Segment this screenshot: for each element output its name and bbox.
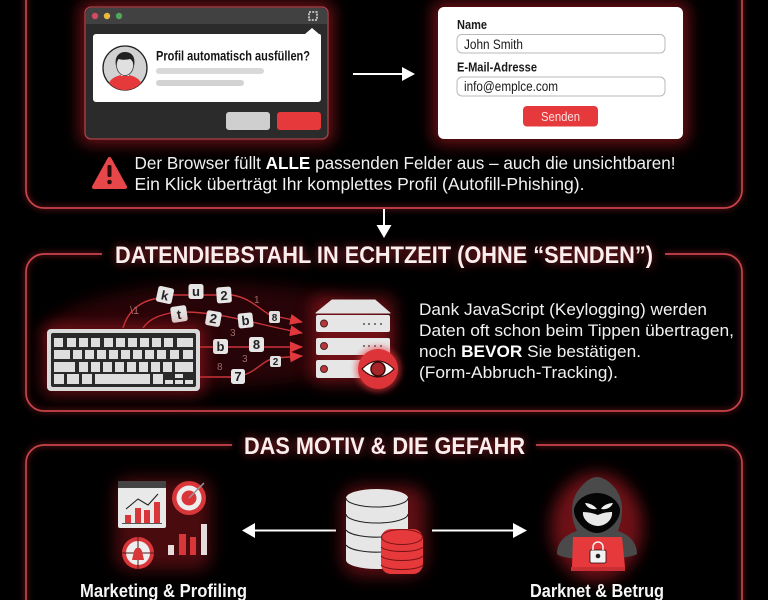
form: filled web form <box>433 2 688 144</box>
stray characters: 3 <box>242 354 248 365</box>
popup heading: Profil automatisch ausfüllen? <box>156 48 310 64</box>
icon: floating key tiles: 8 <box>272 313 278 324</box>
stray characters: \1 <box>130 305 139 317</box>
description text: Dank JavaScript (Keylogging) werden <box>419 300 707 319</box>
icon: floating key tiles: 2 <box>209 311 218 327</box>
warning text <box>134 153 676 194</box>
description text: (Form-Abbruch-Tracking). <box>419 363 618 382</box>
profile crosshair <box>122 537 154 569</box>
form: filled web form: John Smith <box>464 37 523 52</box>
form: filled web form: Senden <box>541 110 580 124</box>
heading: data theft: DATENDIEBSTAHL IN ECHTZEIT (OHNE “SENDEN”) <box>115 242 653 269</box>
description text: noch BEVOR Sie bestätigen. <box>419 342 641 361</box>
stray characters: 1 <box>254 295 260 306</box>
arrow: section connector <box>376 209 392 238</box>
icon: keyboard <box>43 325 204 395</box>
icon: data streams <box>123 295 302 377</box>
heading: motive: DAS MOTIV & DIE GEFAHR <box>244 433 525 460</box>
panel: motive and danger <box>26 433 742 600</box>
stray characters: 3 <box>230 328 236 339</box>
icon: marketing group <box>115 478 211 570</box>
icon: floating key tiles: b <box>217 339 225 354</box>
icon: server with eye <box>312 296 401 392</box>
red database <box>381 529 423 574</box>
icon: browser autofill popup <box>80 2 333 144</box>
form: filled web form: Name <box>457 18 487 32</box>
panel: autofill section <box>26 0 742 208</box>
arrow: to marketing <box>242 523 336 538</box>
description text <box>419 300 734 382</box>
chart window <box>118 481 166 528</box>
warning text: Der Browser füllt ALLE passenden Felder aus – auch die unsichtbaren! <box>134 153 676 173</box>
icon: floating key tiles <box>156 284 281 384</box>
icon: hacker with laptop <box>551 473 643 581</box>
icon: floating key tiles: k <box>160 287 171 304</box>
warning text: Ein Klick überträgt Ihr komplettes Profil (Autofill-Phishing). <box>134 174 584 194</box>
arrow: popup to form <box>353 67 415 81</box>
form: filled web form: info@emplce.com <box>464 79 558 94</box>
panel: real-time data theft <box>26 242 742 411</box>
heading: motive: DAS MOTIV & DIE GEFAHR <box>244 433 525 460</box>
icon: floating key tiles: 2 <box>273 357 279 368</box>
description text: Daten oft schon beim Tippen übertragen, <box>419 321 734 340</box>
form: filled web form: E-Mail-Adresse <box>457 60 537 74</box>
icon: floating key tiles: 8 <box>253 337 260 352</box>
icon: floating key tiles: 2 <box>220 288 228 303</box>
background glow behind key stream <box>45 283 395 387</box>
arrow: to darknet <box>432 523 527 538</box>
heading: data theft: DATENDIEBSTAHL IN ECHTZEIT (OHNE “SENDEN”) <box>115 242 653 269</box>
icon: floating key tiles: 7 <box>234 369 242 384</box>
icon: floating key tiles: u <box>192 284 200 299</box>
icon: floating key tiles: b <box>241 313 250 328</box>
small bar chart <box>168 524 207 555</box>
icon: user avatar <box>103 46 147 90</box>
icon: database <box>342 486 426 576</box>
stray characters: 8 <box>217 362 223 373</box>
icon: warning triangle <box>94 159 125 187</box>
stray characters <box>130 295 260 373</box>
icon: floating key tiles: t <box>176 307 183 322</box>
target <box>172 481 206 515</box>
